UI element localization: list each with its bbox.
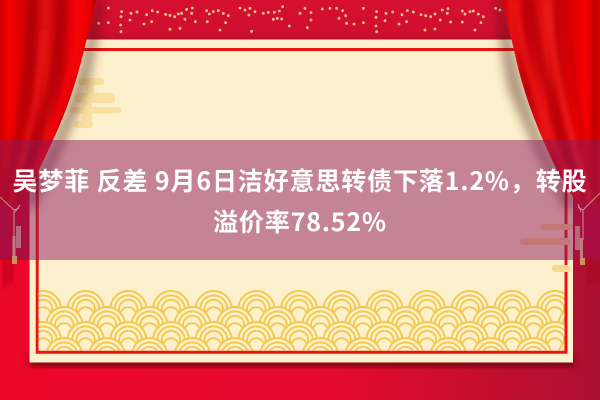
cream card [30, 40, 573, 362]
left tassel [0, 197, 21, 264]
left curtain [0, 0, 96, 205]
wave pattern [38, 290, 564, 350]
headline text: 溢价率78.52% [213, 203, 387, 239]
top red band [0, 0, 600, 40]
cloud motif right [520, 224, 575, 272]
right tassel [575, 193, 600, 265]
curtain shadows [20, 0, 578, 210]
lower curtain folds [0, 198, 600, 288]
headline text [13, 162, 587, 239]
gold confetti dots [99, 7, 500, 32]
card shadow [30, 354, 573, 367]
pink overlay band [0, 140, 600, 260]
red inner frame [37, 50, 566, 352]
headline text: 吴梦菲 反差 9月6日洁好意思转债下落1.2%，转股 [13, 162, 587, 198]
cloud motif left [70, 78, 121, 128]
right curtain [500, 0, 600, 220]
